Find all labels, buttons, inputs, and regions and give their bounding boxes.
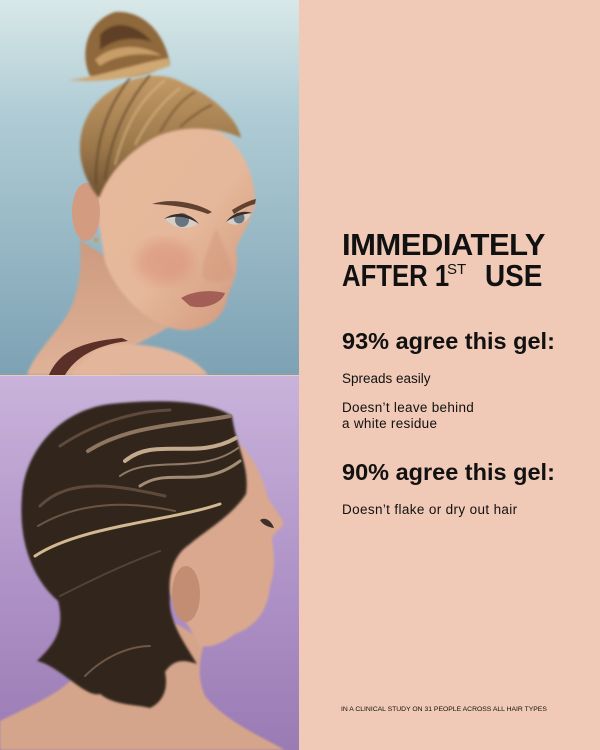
heading: USE [485, 258, 542, 293]
claim: spreads easily: Spreads easily [342, 371, 431, 386]
hair strands [96, 75, 212, 185]
photo panel: brunette model in profile with finger waves [0, 376, 299, 750]
claim: no white residue: Doesn’t leave behind [342, 400, 474, 415]
bra strap [49, 338, 128, 375]
ear [72, 183, 100, 241]
subheading: 93%: 93% agree this gel: [342, 328, 555, 354]
claim: no white residue [342, 400, 474, 431]
photo panel: blonde model with top bun [0, 0, 299, 375]
face [165, 436, 283, 646]
hair dome [80, 76, 241, 198]
eyes [164, 212, 252, 228]
subheading: 90%: 90% agree this gel: [342, 459, 555, 485]
nose shadow [202, 228, 234, 282]
footnote: IN A CLINICAL STUDY ON 31 PEOPLE ACROSS ALL HAIR TYPES [341, 706, 547, 713]
hair bun [68, 12, 170, 81]
heading: IMMEDIATELY [342, 227, 545, 262]
cheek blush [137, 240, 193, 284]
hair highlights [35, 410, 240, 676]
heading: ST [447, 261, 466, 278]
eyebrows [152, 199, 256, 214]
ear [172, 566, 200, 622]
eye [260, 519, 274, 528]
shoulder [70, 344, 208, 375]
lips [181, 291, 225, 307]
claim: no white residue: a white residue [342, 416, 437, 431]
earring [94, 238, 98, 242]
background [0, 0, 299, 375]
heading: AFTER 1 [342, 258, 449, 293]
background [0, 376, 299, 750]
claim: no flaking: Doesn’t flake or dry out hair [342, 502, 518, 517]
neck and shoulders [0, 596, 285, 750]
hair mass [21, 401, 247, 708]
face [95, 125, 255, 330]
heading [342, 227, 545, 293]
neck [27, 240, 190, 375]
